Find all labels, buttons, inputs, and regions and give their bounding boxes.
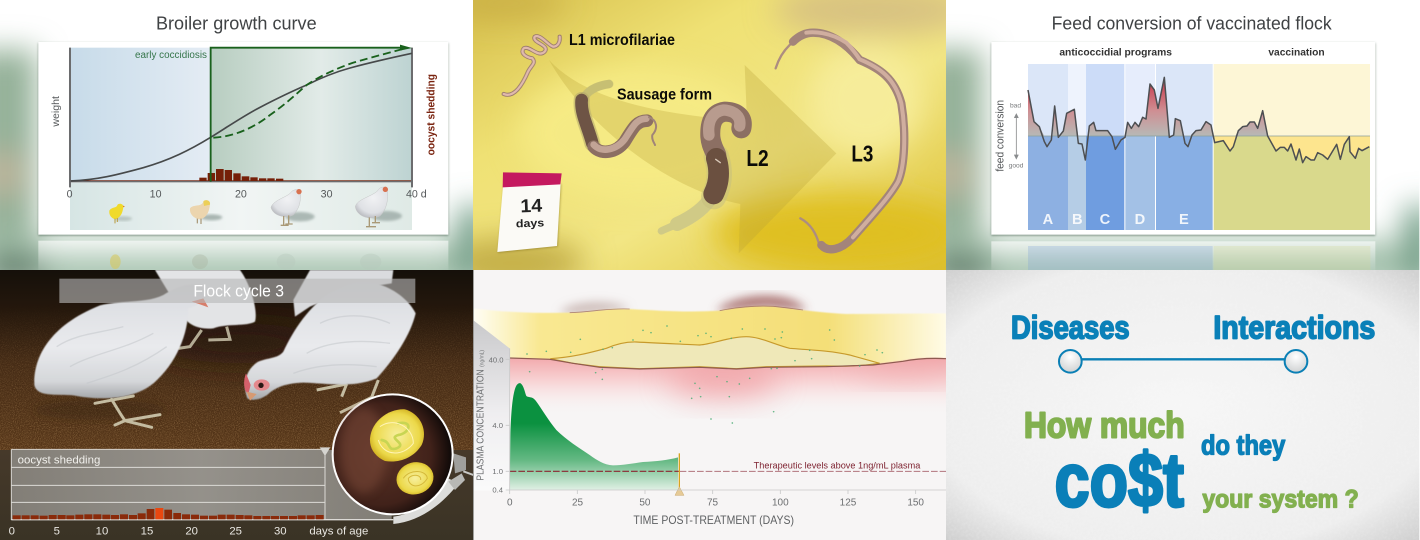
band letters: E: [1179, 212, 1189, 228]
calendar: 14 days: [497, 172, 562, 252]
panel: plasma concentration chart: [473, 270, 956, 540]
red area above baseline: [1028, 77, 1268, 136]
band letters: D: [1135, 212, 1145, 228]
axes: [506, 348, 946, 494]
x axis labels: 0: [9, 525, 15, 537]
label: feed conversion: feed conversion: [994, 100, 1006, 172]
x axis labels: 5: [54, 525, 60, 537]
worm: L1 microfilariae: [504, 36, 560, 95]
chart card: [38, 42, 448, 235]
icon: yellow chick: [109, 204, 132, 223]
hen left foreground: [34, 285, 208, 427]
axes: [69, 48, 413, 187]
connector between nodes: [1059, 350, 1307, 373]
time marker: [320, 447, 330, 456]
calendar: 14 days: days: [516, 217, 544, 230]
heading: Diseases: Diseases: [1011, 309, 1130, 345]
yellow background: [473, 0, 946, 270]
early coccidiosis marker and arrow: [211, 45, 412, 182]
y axis title: PLASMA CONCENTRATION (ng/mL): [476, 350, 487, 481]
label: L2: L2: [746, 145, 769, 171]
feed conversion line: [1028, 77, 1369, 163]
x axis labels: [9, 525, 368, 537]
grey background: [946, 270, 1420, 540]
x axis labels: 15: [141, 525, 153, 537]
x axis labels: [67, 190, 426, 198]
y axis tick labels: [489, 355, 504, 495]
panel: broiler growth curve: [0, 16, 473, 270]
x axis tick labels: 100: [772, 497, 789, 508]
label: early coccidiosis: early coccidiosis: [135, 50, 207, 61]
label: vaccination: vaccination: [1268, 48, 1325, 59]
x axis labels: 20: [185, 525, 198, 537]
magnifier handle: [393, 453, 473, 524]
x axis labels: 25: [229, 525, 242, 537]
yellow highlight above line in vaccination zone: [1215, 136, 1370, 163]
worm: sausage form: [582, 84, 656, 152]
plot backgrounds: [70, 48, 412, 230]
x axis title: TIME POST-TREATMENT (DAYS): [633, 514, 794, 527]
label: oocyst shedding: oocyst shedding: [18, 454, 100, 466]
muscle layer: [510, 357, 956, 414]
title: broiler growth curve: Broiler growth curve: [156, 12, 317, 33]
label: L3: L3: [851, 140, 873, 166]
x axis tick labels: 150: [907, 497, 924, 508]
title bar: [59, 279, 415, 303]
green drug particles: [526, 325, 883, 424]
plasma concentration area: [510, 383, 678, 490]
bars: [13, 508, 324, 519]
label: therapeutic levels: Therapeutic levels above 1ng/mL plasma: [754, 461, 920, 471]
fat layer: [473, 306, 946, 368]
panel: feed conversion of vaccinated flock: [946, 0, 1420, 270]
hen right foreground: [244, 282, 416, 413]
text: cost: co$t: [1055, 438, 1184, 523]
magnified oocysts: [333, 394, 453, 514]
x axis tick labels: 25: [572, 497, 584, 508]
x axis labels: 10: [96, 525, 108, 537]
arrow: [549, 60, 836, 253]
x axis labels: 0: [67, 188, 73, 200]
baseline: [1028, 136, 1370, 137]
reflection of chart card: [991, 241, 1375, 270]
band letters: A: [1043, 212, 1054, 228]
text: your system?: your system ?: [1202, 486, 1359, 514]
chart card: [991, 42, 1375, 235]
fat lump: [550, 337, 880, 369]
inflammation shadow: [560, 296, 806, 314]
x axis tick labels: [507, 497, 924, 508]
y axis tick labels: 40.0: [489, 355, 504, 364]
x axis tick labels: 50: [639, 497, 651, 508]
litter floor: [0, 270, 473, 540]
x axis tick labels: 0: [507, 497, 513, 508]
calendar: 14 days: 14: [520, 195, 543, 216]
y axis tick labels: 1.0: [492, 467, 503, 476]
label: L1 microfilariae: L1 microfilariae: [569, 32, 675, 49]
x axis tick labels: 125: [840, 497, 857, 508]
x axis labels: 40 d: [406, 188, 427, 200]
title: feed conversion of vaccinated flock: Feed conversion of vaccinated flock: [1052, 12, 1332, 33]
program bands: [1028, 64, 1370, 230]
x axis labels: 20: [235, 188, 247, 200]
panel edge: [472, 270, 475, 540]
icon: adult chicken: [355, 187, 402, 227]
x axis labels: 30: [321, 188, 333, 200]
panel: cost of disease interactions: [946, 270, 1420, 540]
bad to good arrow: [1014, 114, 1018, 159]
x axis labels: days of age: [309, 525, 368, 537]
oocyst shedding bars: [71, 169, 412, 182]
text: do they: do they: [1201, 429, 1286, 460]
heading: Interactions: Interactions: [1213, 309, 1375, 345]
label: bad: bad: [1010, 102, 1021, 109]
duration marker: [675, 453, 684, 495]
band letters: C: [1100, 212, 1111, 228]
label: Sausage form: Sausage form: [617, 86, 712, 103]
background: [473, 270, 946, 540]
label: anticoccidial programs: anticoccidial programs: [1059, 48, 1172, 59]
label: weight: weight: [51, 96, 62, 128]
label: oocyst shedding: oocyst shedding: [426, 74, 438, 155]
worm: L3: [776, 32, 904, 251]
icon: young chick: [190, 200, 222, 224]
oocyst shedding chart: [11, 449, 393, 520]
growth curve: [71, 53, 412, 181]
panel: nematode larval stages: [440, 0, 973, 290]
lower fat edge: [510, 358, 946, 369]
y axis tick labels: 4.0: [492, 421, 503, 430]
band letters: B: [1072, 212, 1083, 228]
x axis labels: 30: [274, 525, 287, 537]
panel: flock cycle 3: [0, 270, 473, 540]
upper fat edge: [570, 306, 803, 313]
band letters: [1043, 212, 1189, 228]
hen in background left: [155, 270, 256, 348]
side wedge: [473, 320, 510, 491]
hen in background right: [293, 270, 393, 317]
text: How much: How much: [1024, 405, 1185, 446]
icon: juvenile chicken: [271, 189, 315, 225]
therapeutic threshold line: [510, 470, 680, 473]
dashed curve with early coccidiosis: [213, 48, 405, 138]
worm: L2: [661, 110, 742, 231]
y axis tick labels: 0.4: [492, 486, 504, 495]
x axis tick labels: 75: [707, 497, 719, 508]
x axis labels: 10: [150, 188, 162, 200]
label: good: good: [1009, 162, 1024, 169]
title: flock cycle 3: Flock cycle 3: [193, 282, 284, 301]
reflection of chart card: [38, 241, 448, 270]
